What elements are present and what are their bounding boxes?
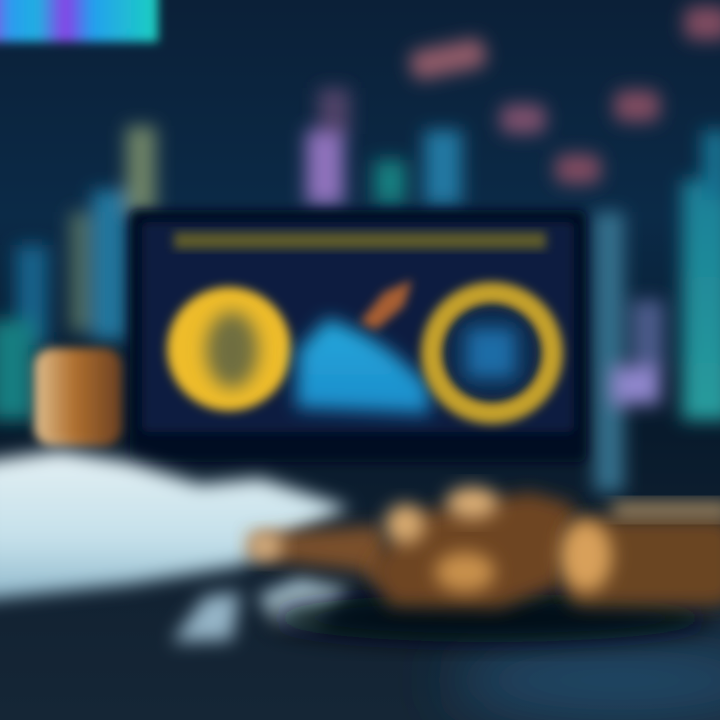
monitor heading [174,232,546,249]
rainbow banner [0,0,158,42]
rocket icon [360,280,412,330]
monitor panel [130,210,586,462]
centre bar chart [306,88,462,205]
left coin stack [34,348,122,446]
white shards [172,578,350,642]
coin icon: right [432,293,552,413]
coin icon: left [167,287,291,411]
pink trend line markers [408,6,720,184]
cloud mountain [296,318,430,414]
right bar chart [594,130,720,492]
floor glow [450,640,720,720]
coin pile [247,487,720,642]
left bar chart [0,126,156,420]
white powder pile [0,450,350,600]
